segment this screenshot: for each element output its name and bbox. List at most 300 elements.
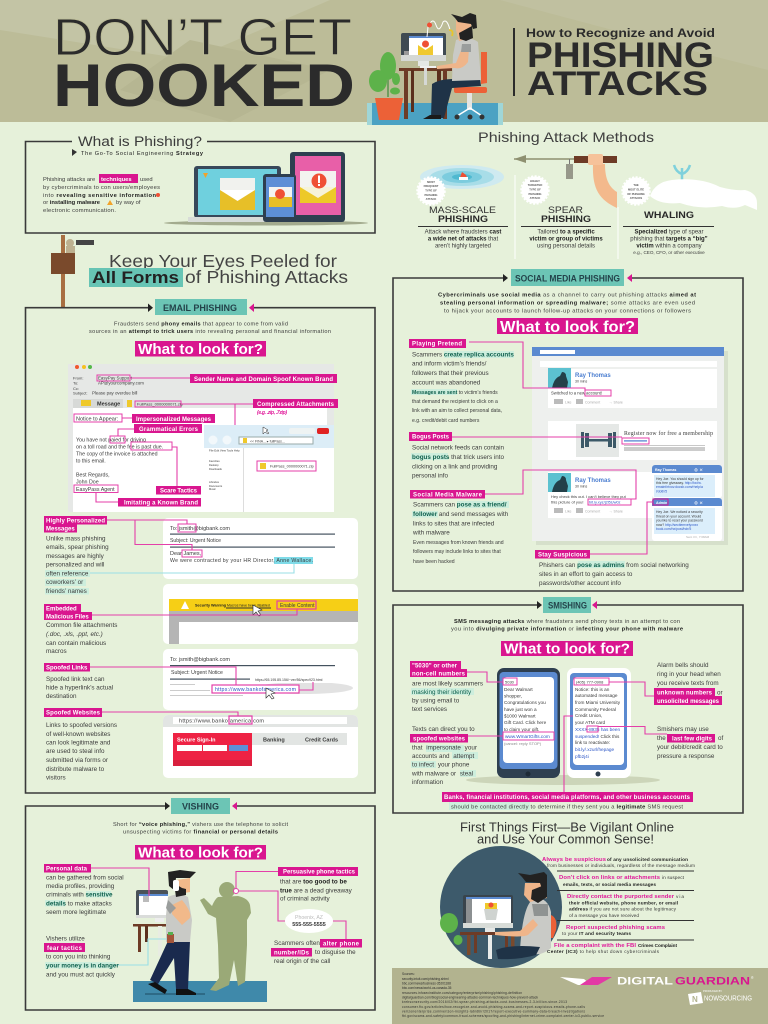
description: Attack where fraudsters cast — [425, 230, 501, 236]
post: ray thomas malware link: Hey check this out. I can’t believe they put — [551, 494, 627, 499]
email mockup: FullPass_0000000071.zip — [137, 402, 184, 406]
sources: digitalguardian.com/blog/social-engineering-attacks-common-techniques-how-prevent-attack — [402, 996, 538, 1000]
text: bogus posts: clicking on a link and providing — [412, 464, 498, 470]
post: ray thomas malware link: → Share — [609, 510, 623, 514]
intro text: SMS messaging attacks where fraudsters send phony texts in an attempt to con — [454, 619, 680, 625]
label: stay suspicious — [535, 550, 590, 558]
body text: can look legitimate and — [46, 740, 111, 746]
text: alter phone numbers — [271, 939, 362, 965]
sources: security.intuit.com/phishing.shtml — [402, 977, 449, 981]
tip: file a complaint: Center (IC3) to help shut down cybercriminals — [547, 949, 660, 955]
phone: bank scam text: bit.ly/.xzurl/hepage — [575, 747, 614, 752]
body text: often reference — [46, 570, 89, 577]
body text: can contain malicious — [46, 640, 106, 647]
chat window: admin: Admin — [656, 501, 667, 505]
post: ray thomas malware link — [548, 472, 652, 518]
chat window: ray thomas — [652, 465, 722, 498]
decorative hook and arm — [514, 154, 618, 259]
text: non-cell numbers: text services — [412, 706, 447, 713]
intro text: Cybercriminals use social media as a channel to carry out phishing attacks aimed at — [438, 292, 696, 298]
text: fear tactics: fear tactics — [47, 946, 83, 952]
post: ray thomas new account: Like — [565, 400, 571, 404]
logo: nowsourcing: N — [692, 995, 698, 1004]
text: unknown numbers: or — [717, 690, 723, 696]
phone: walmart scam text: Dear Walmart — [504, 687, 533, 692]
post: ray thomas new account: Ray Thomas — [575, 373, 611, 379]
text: stay suspicious: Phishers can pose as admins from social networking — [539, 562, 689, 569]
callout: imitating a known brand: Imitating a Known Brand — [124, 500, 198, 506]
label — [44, 604, 92, 620]
intro text: to hijack your accounts to launch follow-up attacks on your connections or followers — [444, 308, 691, 314]
caller id bubble: 555-555-5555 — [292, 922, 326, 928]
callout: grammatical errors: Grammatical Errors — [139, 427, 199, 433]
text: unknown numbers: Alarm bells should — [657, 662, 709, 669]
spoofed links — [44, 649, 358, 710]
title: Don't Get Hooked — [53, 9, 355, 119]
card: security warning: Security Warning — [195, 604, 227, 608]
description — [425, 230, 501, 250]
label: non-cell numbers: non-cell numbers — [412, 672, 466, 678]
body text: distribute malware to — [46, 766, 105, 773]
phone: bank scam text: suspended! Click this — [575, 734, 620, 739]
intro text — [438, 292, 696, 314]
subheading — [72, 149, 204, 157]
card: spoofed link email: https://65.195.85.156/~ver/56/spec923.html — [255, 678, 323, 682]
card: personalized email — [163, 518, 358, 579]
badge — [522, 176, 548, 204]
intro text: sources in an attempt to trick users into revealing personal and financial information — [89, 329, 331, 335]
card: security warning: Enable Content — [280, 603, 315, 609]
text: non-cell numbers: masking their identity — [412, 689, 472, 696]
chat window: ray thomas: emaint/rtxov.docsb.com/rhelp/a — [656, 485, 703, 489]
text: stay suspicious: sites in an effort to gain access to — [539, 571, 633, 578]
email body text: Best Regards, — [76, 472, 110, 478]
text: personal data: media profiles, providing — [46, 883, 115, 890]
definition text: electronic communication. — [43, 208, 116, 214]
panel: social media phishing — [393, 269, 743, 591]
callout: grammatical errors — [134, 424, 202, 433]
text: persuasive phone tactics: true are a dead giveaway — [280, 888, 353, 894]
text: alter phone numbers: Scammers often — [274, 940, 320, 947]
badge — [418, 178, 444, 204]
phone: bank scam text — [567, 668, 631, 778]
text: spoofed websites: Texts can direct you to — [412, 726, 475, 733]
tip: report scams: to your IT and security teams — [562, 931, 631, 937]
label: Messages — [46, 527, 75, 533]
text: non-cell numbers: are most likely scammers — [412, 680, 483, 688]
text: personal data: criminals with sensitive — [46, 892, 113, 898]
body text: friends’ names — [46, 588, 87, 595]
tip: contact sender: via — [676, 894, 684, 900]
text: playing pretend: that demand the recipient to click on a — [412, 399, 498, 405]
callout: banks and businesses: should be contacted directly to determine if they sent you a legitimate SMS request — [451, 804, 683, 810]
callout: imitating a known brand — [118, 498, 201, 506]
body text: coworkers’ or — [46, 579, 83, 586]
attachment window: Downloads — [209, 467, 223, 471]
chat window: admin: ⚙ ✕ — [694, 500, 703, 506]
label: playing pretend: Playing Pretend — [412, 342, 462, 348]
body text: destination — [46, 693, 77, 700]
text: personal data: can be gathered from social — [46, 874, 124, 882]
callout: banks and businesses — [442, 792, 693, 810]
phone: bank scam text: Credit Union, — [575, 713, 602, 718]
text: unknown numbers: ring in your head when — [657, 671, 721, 678]
post: ray thomas new account: 30 mins — [575, 380, 588, 384]
text: social media malware — [412, 501, 509, 565]
what to look for banner: What to look for? — [504, 640, 630, 658]
section tag: social media phishing: SOCIAL MEDIA PHISHING — [515, 274, 620, 284]
phone: walmart scam text: Gift Card. Click here — [504, 720, 547, 725]
section tag: email phishing — [148, 299, 254, 315]
label: non-cell numbers — [410, 661, 467, 678]
body text: Spoofed link text can — [46, 676, 105, 683]
definition text: Phishing attacks are — [43, 177, 95, 183]
post: ray thomas malware link: bit.ly.xyz/j2l5Uw0z — [589, 500, 621, 504]
definition text: used — [140, 177, 153, 183]
body text: of well-known websites — [46, 731, 110, 738]
sources: bbc.com/news/world-us-canada-35 — [402, 986, 452, 990]
label: personal data: Personal data — [46, 866, 88, 872]
text: fear tactics — [44, 936, 119, 978]
post: ray thomas new account: Comment — [585, 400, 600, 404]
text: social media malware: follower and send messages with — [413, 511, 509, 518]
callout line: sender — [130, 378, 257, 467]
attachment window: Desktop — [209, 463, 219, 467]
text: bogus posts — [411, 444, 505, 480]
sources: resources.infosecinstitute.com/category/enterprise/phishing/phishing-definition — [402, 991, 522, 995]
card: spoofed link email: To: jsmith@bigbank.com — [170, 657, 230, 663]
method: mass-scale phishing — [418, 165, 508, 250]
description: Specialized type of spear — [634, 230, 704, 236]
post: ray thomas malware link: this picture of you! — [551, 500, 583, 504]
description: e.g., CEO, CFO, or other executive — [633, 250, 705, 255]
text: non-cell numbers: by using email to — [412, 698, 460, 704]
chat window: admin — [652, 498, 722, 541]
sources — [402, 972, 604, 1018]
card: security warning: Macros have been disabled — [227, 604, 270, 608]
logo: digital guardian: GUARDIAN — [675, 976, 750, 988]
email mockup — [68, 364, 338, 512]
card: spoofed website: https://www.bankofamerica.com — [179, 718, 264, 724]
header subtitle: How to Recognize and Avoid Phishing Attacks: PHISHING — [527, 36, 714, 75]
sources: Sources: — [402, 972, 415, 976]
section tag: social media phishing — [503, 269, 632, 286]
card: spoofed link email: Subject: Urgent Notice — [171, 670, 223, 676]
description: aren’t highly targeted — [435, 244, 491, 250]
card: security warning — [163, 584, 358, 644]
tip: don't click: in suspect — [662, 875, 685, 881]
post: ray thomas malware link: Comment — [585, 510, 600, 514]
text: playing pretend: Messages are sent to victim’s friends — [412, 390, 498, 396]
attachment window: Music — [209, 487, 216, 491]
card: personalized email: We were contracted by your HR Director, Anne Wallace. — [170, 558, 313, 564]
badge: TYPE OF — [529, 188, 541, 192]
post: ray thomas new account: → Share — [609, 400, 623, 404]
sources: krebsonsecurity.com/2016/02/fbi-spear-phishing-attacks-cost-businesses-2-3-billion-since-2013 — [402, 1000, 567, 1004]
label: social media malware — [410, 490, 485, 498]
text: fear tactics: Vishers utilize — [46, 936, 85, 942]
email mockup: AP@yourcompany.com — [98, 380, 144, 386]
label: Spoofed Links — [46, 666, 88, 672]
icon: devices with alert envelopes — [164, 152, 368, 226]
text: personal data: seem more legitimate — [46, 909, 107, 916]
text: persuasive phone tactics — [280, 878, 353, 902]
text: unknown numbers — [654, 662, 723, 705]
badge: THE — [633, 183, 639, 187]
email body text: Notice to Appear: — [76, 416, 119, 422]
text: unknown numbers: unsolicited messages — [657, 699, 720, 705]
intro text: stealing personal information or spreading malware; some attacks are even used — [440, 300, 695, 306]
phone: bank scam text: from Miami University — [575, 700, 621, 705]
label: persuasive phone tactics: Persuasive phone tactics — [283, 870, 356, 876]
heading: phishing attack methods: Phishing Attack Methods — [478, 129, 654, 145]
definition text: or installing malware — [43, 200, 101, 206]
text: alter phone numbers: real origin of the call — [274, 958, 330, 965]
phone: bank scam text: your ATM card — [575, 720, 606, 725]
title: Don't Get Hooked: DON’T GET — [53, 9, 352, 67]
text: social media malware: have been hacked — [413, 559, 455, 565]
panel: email phishing — [26, 299, 375, 793]
badge: PHISHING — [424, 193, 438, 197]
callout: compressed attachments: (e.g. .zip, .7zip) — [257, 410, 287, 416]
text: last few digits: your debit/credit card to — [657, 744, 723, 751]
logo: nowsourcing — [688, 989, 752, 1005]
text: personal data — [45, 874, 124, 916]
label: social media malware: Social Media Malware — [413, 492, 483, 498]
sources: fbi.gov/scams-and-safety/common-fraud-schemes/spoofing-and-phishing/internet-crime-complaint-center-ic3-public-service — [402, 1014, 604, 1018]
tip: always be suspicious — [542, 857, 695, 869]
body text: emails, spear phishing — [46, 544, 109, 551]
method: whaling — [622, 165, 757, 255]
post: ray thomas new account — [548, 368, 717, 408]
phone: walmart scam text: $1000 Walmart — [504, 714, 536, 718]
text: bogus posts: Social network feeds can contain — [412, 444, 505, 452]
phone: walmart scam text: shopper, — [504, 694, 522, 698]
intro text: unsuspecting victims for financial or personal details — [123, 830, 278, 836]
phone: bank scam text: automated message — [575, 693, 618, 698]
email mockup: Message — [97, 402, 120, 408]
intro text — [89, 322, 331, 335]
heading: first things first: and Use Your Common Sense! — [477, 832, 654, 846]
label: PHISHING — [438, 214, 488, 225]
chat window: ray thomas: Hey Joe. You should sign up for — [656, 477, 705, 481]
phone: walmart scam text: to claim your gift. — [504, 727, 539, 732]
card: spoofed link email: https://www.bankofamerica.com — [215, 687, 297, 693]
tip: always be suspicious: of any unsolicited communication — [607, 857, 688, 862]
label: PHISHING — [541, 214, 591, 225]
text: unknown numbers: you receive texts from — [657, 680, 719, 687]
heading: keep your eyes peeled — [89, 251, 348, 287]
section tag: vishing: VISHING — [182, 802, 219, 812]
body text: are used to steal info — [46, 748, 105, 755]
badge: ATTACK — [426, 197, 436, 201]
email body text: to this email. — [76, 458, 106, 464]
footer band — [392, 968, 768, 1024]
post: ray thomas malware link: 30 mins — [575, 484, 588, 488]
intro text: Short for “voice phishing,” vishers use the telephone to solicit — [113, 822, 288, 828]
definition text: by way of — [116, 200, 141, 206]
text: persuasive phone tactics: that are too good to be — [280, 878, 347, 886]
chat window: admin: threat on your account. Would — [656, 514, 701, 518]
callout: banks and businesses: Banks, financial institutions, social media platforms, and other business accounts — [444, 795, 691, 801]
email mockup: Cc: — [73, 386, 79, 391]
definition text: by cybercriminals to con users/employees — [43, 185, 160, 191]
tip: contact sender: their official website, phone number, or email — [569, 900, 678, 906]
logo: digital guardian: ® — [751, 976, 754, 980]
text: alter phone numbers: to disguise the — [315, 949, 356, 956]
email body text: on a toll road and the fee is past due. — [76, 444, 163, 450]
tip: report scams: Report suspected phishing scams — [566, 925, 666, 931]
icon: ripple with bobber — [420, 165, 504, 189]
badge: FREQUENT — [424, 184, 439, 188]
tip: contact sender: of a message you have received — [569, 913, 639, 919]
text: playing pretend: account was abandoned — [412, 380, 481, 386]
heading: keep your eyes peeled: of Phishing Attacks — [185, 267, 348, 287]
callout: sender name: Sender Name and Domain Spoof Known Brand — [194, 377, 333, 383]
heading: first things first — [460, 820, 674, 846]
chat window: admin: Sent 3 h, 7:08AM — [686, 535, 710, 539]
tip: contact sender: address if you are not sure about the legitimacy — [569, 906, 677, 912]
text: alter phone numbers: number/IDs — [274, 950, 310, 956]
body text — [46, 722, 117, 782]
label — [44, 663, 90, 672]
attachment window: Favorites — [209, 459, 220, 463]
spear email: highly personalized messages — [44, 516, 358, 595]
phone: walmart scam text: 5030 — [505, 680, 515, 684]
tip: don't click: Don’t click on links or attachments — [559, 875, 661, 881]
badge: PHISHING — [528, 192, 542, 196]
email body text: John Doe — [76, 480, 99, 486]
body text — [46, 622, 117, 655]
what to look for banner: What to look for? — [500, 319, 635, 336]
body text: Links to spoofed versions — [46, 722, 117, 729]
text: social media malware: Scammers can pose as a friend/ — [413, 502, 507, 508]
label: Highly Personalized — [46, 518, 105, 524]
tip: file a complaint: File a complaint with the FBI — [554, 943, 636, 949]
callout: impersonalized messages: Impersonalized Messages — [136, 417, 212, 423]
embedded malicious files — [44, 584, 358, 655]
description — [630, 230, 708, 255]
post: gym ad — [548, 421, 717, 460]
what to look for banner: What to look for? — [138, 341, 263, 358]
post: ray thomas new account: Switched to a new account! — [551, 390, 602, 396]
label: bogus posts — [409, 432, 452, 441]
logo: digital guardian: DIGITAL — [617, 976, 673, 988]
card: spoofed website: Secure Sign-In — [177, 738, 216, 744]
badge: ATTACKS — [630, 196, 642, 200]
label: persuasive phone tactics — [278, 867, 358, 876]
label: personal data — [44, 864, 91, 872]
definition text — [43, 174, 160, 214]
text: fear tactics: your money is in danger — [46, 962, 119, 970]
heading: keep your eyes peeled: All Forms — [92, 268, 179, 287]
text: social media malware: links to sites that are infected — [413, 520, 495, 528]
text: bogus posts: personal info — [412, 472, 449, 480]
text: spoofed websites: accounts and attempt — [412, 753, 474, 760]
phone: bank scam text: Community Federal — [575, 707, 616, 712]
description: a wide net of attacks that — [428, 236, 499, 242]
label — [44, 708, 102, 717]
text: last few digits: the — [657, 735, 666, 742]
body text — [45, 535, 109, 595]
text: spoofed websites: that impersonate your — [412, 744, 477, 752]
panel: vishing — [26, 798, 375, 1010]
chat window: admin: book.com/hx/post/hdr/5 — [656, 527, 691, 531]
phone: bank scam text: link to reactivate: — [575, 740, 610, 745]
text: playing pretend: Scammers create replica accounts — [412, 352, 514, 358]
description — [529, 230, 603, 250]
tip: contact sender: Directly contact the purported sender — [567, 894, 675, 900]
text: stay suspicious: passwords/other account info — [539, 580, 621, 587]
badge — [622, 178, 650, 204]
text: social media malware: Even messages from known friends and — [413, 540, 504, 546]
text: non-cell numbers — [411, 680, 483, 713]
label: stay suspicious: Stay Suspicious — [538, 552, 588, 558]
heading: keep your eyes peeled: Keep Your Eyes Peeled for — [109, 251, 337, 271]
tip: contact sender — [567, 894, 684, 919]
label — [44, 516, 107, 533]
sources: bbc.com/news/business-35201188 — [402, 982, 451, 986]
tip: always be suspicious: from businesses or individuals, regardless of the message medium — [547, 863, 695, 869]
text: last few digits: of — [718, 735, 724, 742]
section tag: smishing — [537, 597, 597, 613]
label: Spoofed Websites — [46, 711, 101, 717]
description: victim or group of victims — [529, 236, 603, 242]
text: spoofed websites: information — [412, 779, 444, 786]
email body text — [74, 414, 172, 493]
post: gym ad: Register now for free a membership — [624, 430, 713, 437]
badge: MOST ELITE — [628, 188, 644, 192]
text: last few digits: pressure a response — [657, 753, 715, 760]
phones illustration — [466, 668, 660, 785]
body text: submitted via forms or — [46, 757, 108, 764]
badge: MOST — [427, 180, 435, 184]
badge: TARGETED — [528, 183, 542, 187]
text: last few digits: last few digits — [672, 736, 713, 742]
section tag: vishing — [165, 798, 237, 814]
section tag: email phishing: EMAIL PHISHING — [163, 303, 237, 314]
chat window: admin: now? http://secitemvelyxxxx — [656, 523, 698, 527]
attachment window: Documents — [209, 484, 223, 488]
phone: bank scam text: (405) 777-0908 — [576, 680, 604, 684]
card: spoofed website — [163, 715, 358, 778]
email body text: EasyPass Agent — [76, 487, 115, 493]
card: personalized email: Dear James, — [170, 551, 202, 557]
text: fear tactics: to con you into thinking — [46, 954, 111, 960]
attachment window — [204, 425, 334, 512]
post: ray thomas malware link: Like — [565, 510, 571, 514]
email mockup: Please pay overdue bill — [92, 390, 137, 396]
phone: walmart scam text: have just won a — [504, 707, 537, 712]
method: spear phishing — [521, 176, 611, 250]
text: alter phone numbers: alter phone — [323, 942, 360, 948]
header band — [0, 0, 768, 122]
title: Don't Get Hooked: HOOKED — [53, 52, 355, 119]
phone: walmart scam text: (cancel: reply STOP) — [504, 741, 542, 746]
phone: walmart scam text — [497, 668, 560, 778]
description: using personal details — [537, 244, 595, 250]
body text: visitors — [46, 774, 66, 782]
icon: whale — [650, 165, 757, 210]
phone: walmart scam text: www.WmartGifts.com — [505, 734, 550, 739]
header subtitle: How to Recognize and Avoid Phishing Attacks — [513, 26, 715, 103]
label: SPEAR — [548, 205, 583, 216]
attachment window: << FINA... ▸ fullPass... — [250, 440, 285, 444]
text: personal data: details to make attacks — [46, 900, 112, 908]
label — [541, 205, 591, 225]
text: playing pretend: followers that their previous — [412, 370, 489, 377]
text: playing pretend: e.g. credit/debit card numbers — [412, 418, 480, 424]
